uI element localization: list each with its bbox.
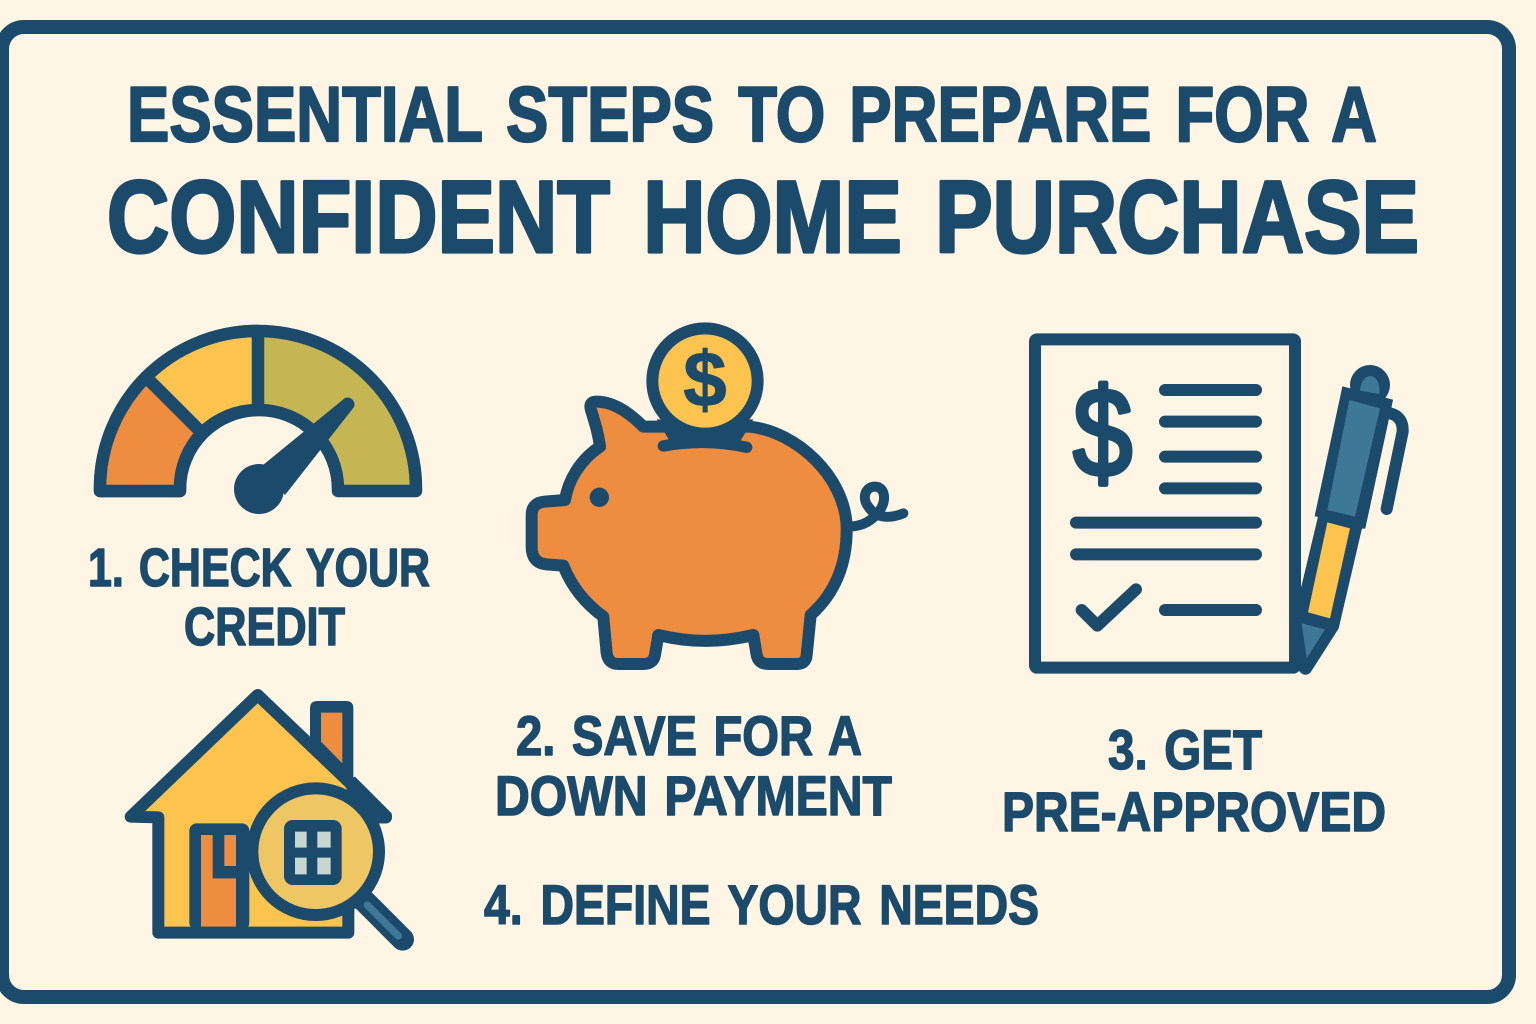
coin slot: [663, 425, 747, 447]
door: [189, 823, 249, 930]
pig eye: [590, 488, 609, 507]
label: step 3: [1002, 718, 1386, 843]
label: step 2: DOWN PAYMENT: [495, 764, 892, 827]
coin: [652, 328, 758, 434]
house body: [131, 695, 386, 933]
label: step 1: 1. CHECK YOUR: [88, 538, 430, 598]
pig body: [532, 402, 847, 664]
label: step 1: [88, 538, 430, 657]
label: step 1: CREDIT: [184, 597, 345, 657]
icon: credit score gauge: [100, 331, 416, 514]
icon: piggy bank with coin: [532, 328, 903, 664]
magnifying glass handle: [360, 897, 403, 939]
label: step 2: 2. SAVE FOR A: [516, 704, 862, 767]
icon: house with magnifying glass: [131, 695, 403, 939]
window: [284, 820, 342, 885]
document: [1035, 339, 1295, 668]
pig tail: [850, 487, 903, 527]
icon: pre-approval document and pen: [1035, 339, 1403, 674]
label: step 3: 3. GET: [1108, 718, 1262, 781]
document dollar sign: $: [1073, 363, 1132, 503]
label: step 4: 4. DEFINE YOUR NEEDS: [484, 873, 1039, 936]
magnifying glass lens: [252, 788, 379, 915]
label: step 3: PRE-APPROVED: [1002, 780, 1386, 843]
pen: [1293, 365, 1403, 674]
title: [107, 70, 1419, 274]
label: step 2: [495, 704, 892, 827]
chimney: [310, 701, 353, 783]
coin: $: [683, 335, 727, 423]
